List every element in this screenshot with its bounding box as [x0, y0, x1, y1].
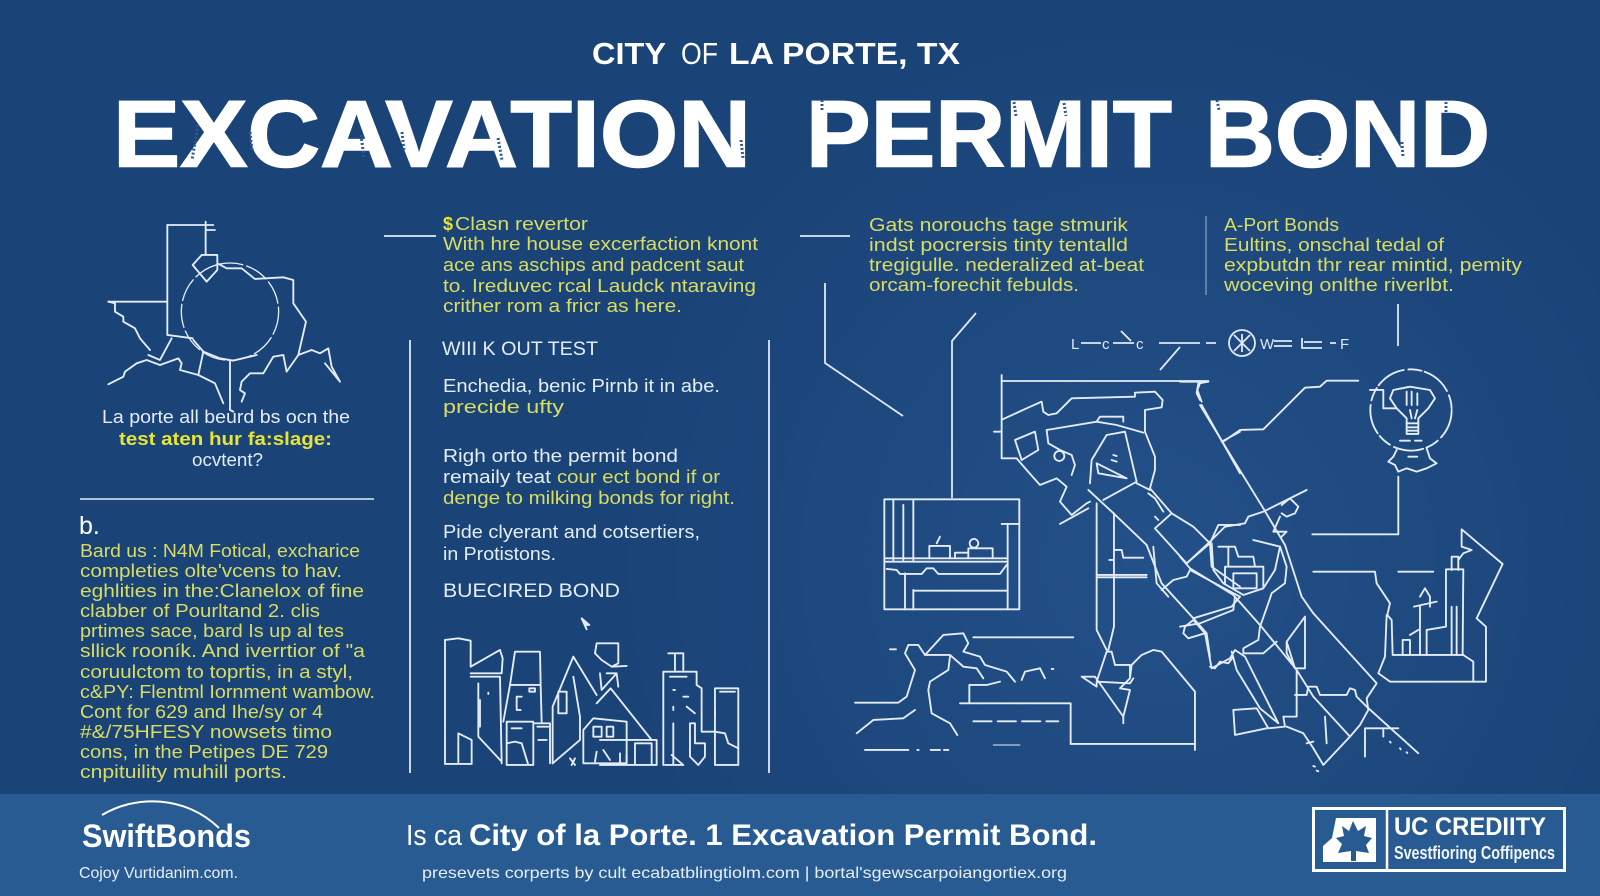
title: PERMIT	[806, 82, 1172, 188]
footer headline: City of la Porte. 1 Excavation Permit Bond.	[469, 819, 1097, 852]
subtitle: CITY	[592, 36, 666, 71]
connector lines	[825, 283, 1398, 498]
text block: gats norouchs: Gats norouchs tage stmurik	[869, 215, 1129, 235]
text block: clasn revertor: Clasn revertor	[455, 214, 588, 234]
legend strip with compass: W	[1260, 336, 1275, 353]
text block: right to the permit bond: remaily teat	[443, 467, 551, 487]
arrow: map to bulb	[1223, 381, 1358, 442]
text block: clasn revertor: ace ans aschips and padcent saut	[443, 255, 744, 275]
footer headline: Is ca	[406, 820, 463, 852]
heading: walk out test: WIII K OUT TEST	[442, 339, 598, 360]
icon: compass	[1229, 330, 1255, 356]
text block: b. paragraph: Cont for 629 and Ihe/sy or 4	[80, 702, 323, 722]
text block: gats norouchs: orcam-forechit febulds.	[869, 275, 1079, 295]
legend strip with compass: c	[1102, 336, 1110, 353]
subtitle: LA PORTE, TX	[729, 36, 960, 71]
text block: b. paragraph: c&PY: Flentml Iornment wambow.	[80, 682, 375, 702]
footer headline: presevets corperts by cult ecabatblingtiolm.com | bortal'sgewscarpoiangortiex.org	[422, 865, 1067, 882]
legend strip with compass: c	[1136, 336, 1144, 353]
subtitle	[592, 36, 960, 71]
text block: gats norouchs: indst pocrersis tinty tentalld	[869, 235, 1128, 255]
text block: b. paragraph: cnpituility muhill ports.	[80, 762, 287, 782]
panel: centre column	[410, 339, 769, 773]
question text: ocvtent?	[192, 450, 263, 470]
text block: b. paragraph: coruulctom to toprtis, in a styl,	[80, 662, 353, 682]
text block: right to the permit bond: denge to milking bonds for right.	[443, 488, 735, 508]
text block: a-port bonds: A-Port Bonds	[1224, 215, 1339, 235]
text block: b. paragraph: Bard us : N4M Fotical, excharice	[80, 541, 360, 561]
text block: pide clyerant: Pide clyerant and cotsertiers,	[443, 522, 700, 542]
logo: SwiftBonds: SwiftBonds	[82, 818, 251, 854]
text block: pide clyerant	[443, 522, 700, 564]
text block: clasn revertor: With hre house excerfaction knont	[443, 234, 758, 254]
text block: enchedia: precide ufty	[443, 397, 564, 417]
connector from bulb	[1312, 477, 1398, 534]
text block: a-port bonds	[1223, 215, 1522, 295]
text block: enchedia: Enchedia, benic Pirnb it in abe.	[443, 376, 720, 396]
icon: Texas outline map	[108, 222, 340, 412]
text block: a-port bonds: woceving onlthe riverlbt.	[1223, 275, 1454, 295]
legend strip with compass: L	[1071, 336, 1079, 353]
text block: clasn revertor: $	[443, 214, 453, 234]
header	[113, 36, 1490, 188]
footer headline	[406, 819, 1097, 882]
badge: UC Credity	[1314, 808, 1564, 871]
blueprint: La Porte street map	[855, 375, 1418, 771]
text block: b. paragraph: sllick rooník. And iverrtior of "a	[80, 641, 366, 661]
text block: b. paragraph: b.	[79, 512, 100, 540]
text block: b. paragraph: #&/75HFESY nowsets timo	[80, 722, 332, 742]
text block: clasn revertor: crither rom a fricr as here.	[443, 296, 682, 316]
legend strip with compass	[1071, 330, 1349, 370]
heading: required bond: BUECIRED BOND	[443, 581, 620, 602]
text block: right to the permit bond	[443, 446, 735, 508]
coastline detail	[855, 633, 1058, 750]
footer band	[0, 794, 1600, 896]
question text: test aten hur fa:slage:	[119, 429, 332, 449]
badge: UC Credity: Svestfioring Coffipencs	[1394, 843, 1555, 863]
subtitle: OF	[681, 36, 718, 71]
panel: Texas map and question	[102, 222, 350, 470]
icon: tower plant blueprint	[1313, 529, 1503, 682]
title: BOND	[1205, 82, 1490, 188]
text block: clasn revertor: to. Ireduvec rcal Laudck ntaraving	[443, 276, 756, 296]
text block: enchedia	[443, 376, 720, 417]
text block: pide clyerant: in Protistons.	[443, 544, 556, 564]
logo: SwiftBonds: Cojoy Vurtidanim.com.	[79, 865, 238, 882]
text block: b. paragraph	[79, 512, 375, 782]
text block: clasn revertor	[443, 214, 758, 316]
text block: right to the permit bond: cour ect bond if or	[557, 467, 720, 487]
text block: b. paragraph: cons, in the Petipes DE 729	[80, 742, 328, 762]
text block: b. paragraph: prtimes sace, bard Is up al tes	[80, 621, 344, 641]
text block: right to the permit bond: Righ orto the permit bond	[443, 446, 678, 466]
question text: La porte all beurd bs ocn the	[102, 407, 350, 427]
blueprint: cross-section box	[884, 499, 1019, 609]
logo: SwiftBonds	[79, 801, 251, 882]
icon: maple leaf	[1323, 818, 1376, 862]
illustration: city skyline	[445, 618, 738, 765]
legend strip with compass: F	[1340, 336, 1349, 353]
badge: UC Credity: UC CREDIITY	[1394, 813, 1546, 841]
icon: cursor mark	[582, 618, 589, 629]
text block: a-port bonds: expbutdn thr rear mintid, pemity	[1224, 255, 1522, 275]
question text	[102, 407, 350, 470]
title: EXCAVATION	[113, 82, 751, 188]
icon: lightbulb globe	[1312, 369, 1452, 534]
text block: b. paragraph: clabber of Pourltand 2. clis	[80, 601, 320, 621]
text block: b. paragraph: completies olte'vcens to hav.	[80, 561, 342, 581]
text block: a-port bonds: Eultins, onschal tedal of	[1224, 235, 1445, 255]
text block: b. paragraph: eghlities in the:Clanelox of fine	[80, 581, 364, 601]
text block: gats norouchs	[869, 215, 1144, 295]
title speckles	[192, 100, 1446, 162]
text block: gats norouchs: tregigulle. nederalized at-beat	[869, 255, 1144, 275]
title	[113, 82, 1490, 188]
